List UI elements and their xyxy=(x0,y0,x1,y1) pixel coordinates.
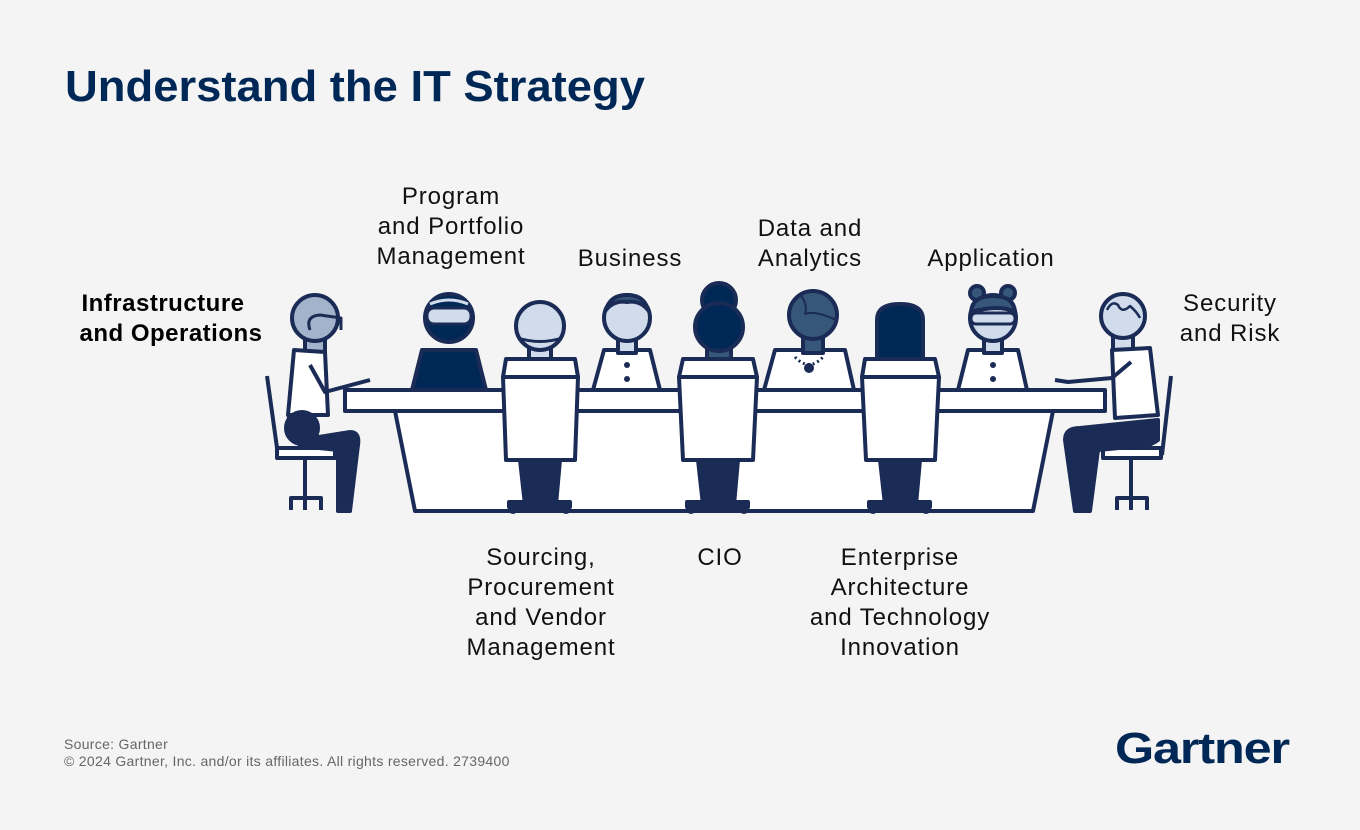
person: Security and Risk (side, right) xyxy=(1055,294,1171,511)
label: Enterprise Architecture and Technology Innovation: Innovation xyxy=(840,634,960,661)
illustration: meeting table xyxy=(267,283,1171,512)
person: Business xyxy=(593,295,660,390)
label: Data and Analytics: Analytics xyxy=(758,245,862,272)
label: CIO: CIO xyxy=(697,544,743,571)
person: Sourcing (back view, chair) xyxy=(503,302,578,512)
source footer: © 2024 Gartner, Inc. and/or its affiliates. All rights reserved. 2739400 xyxy=(64,753,510,769)
person: Infrastructure and Operations (side, left) xyxy=(267,295,370,511)
title: Understand the IT Strategy xyxy=(65,62,646,111)
source footer xyxy=(64,736,510,769)
label: Program and Portfolio Management: and Portfolio xyxy=(378,213,524,240)
label: Sourcing, Procurement and Vendor Management: and Vendor xyxy=(475,604,607,631)
label: Enterprise Architecture and Technology Innovation: Architecture xyxy=(831,574,969,601)
label: Business: Business xyxy=(578,245,682,272)
person: Enterprise Architecture (back view, chair) xyxy=(862,304,939,512)
label: Application: Application xyxy=(927,245,1055,272)
label: Security and Risk: and Risk xyxy=(1180,320,1280,347)
label: Infrastructure and Operations: Infrastructure xyxy=(81,290,245,317)
labels xyxy=(79,183,1280,661)
label: Sourcing, Procurement and Vendor Management: Sourcing, xyxy=(486,544,596,571)
person: CIO (back view, chair) xyxy=(679,283,757,512)
label: Enterprise Architecture and Technology Innovation: Enterprise xyxy=(841,544,959,571)
source footer: Source: Gartner xyxy=(64,736,168,752)
label: Sourcing, Procurement and Vendor Management: Procurement xyxy=(467,574,615,601)
label: Sourcing, Procurement and Vendor Management: Management xyxy=(466,634,616,661)
label: Enterprise Architecture and Technology Innovation: and Technology xyxy=(810,604,990,631)
label: Data and Analytics: Data and xyxy=(758,215,862,242)
person: Data and Analytics xyxy=(764,291,854,390)
label: Infrastructure and Operations: and Operations xyxy=(79,320,263,347)
table xyxy=(345,390,1105,511)
person: Application xyxy=(958,286,1027,390)
label: Security and Risk: Security xyxy=(1183,290,1277,317)
label: Program and Portfolio Management: Program xyxy=(402,183,500,210)
label: Program and Portfolio Management: Management xyxy=(376,243,526,270)
person: Program and Portfolio Management xyxy=(412,294,486,390)
logo: Gartner: Gartner xyxy=(1115,724,1290,773)
